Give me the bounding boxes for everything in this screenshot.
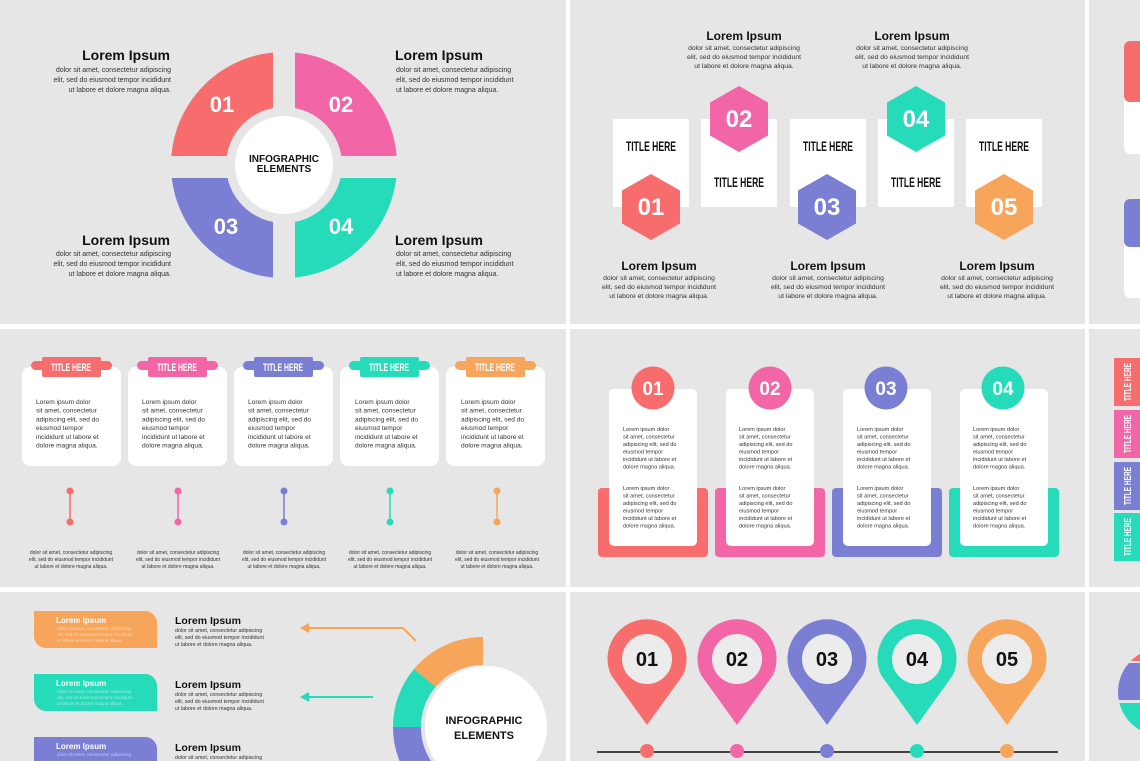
bottom small texts: dolor sit amet, consectetur adipiscing xyxy=(349,550,431,556)
panel: numbered cards with bases: Lorem ipsum dolor xyxy=(973,427,1019,433)
texts: dolor sit amet, consectetur adipiscing xyxy=(941,275,1053,282)
panel: numbered cards with bases: adipiscing elit, sed do xyxy=(973,442,1026,448)
panel: right column top cards xyxy=(1124,41,1140,298)
panel: numbered cards with bases: sit amet, consectetur xyxy=(739,434,791,440)
panel: numbered cards with bases: adipiscing elit, sed do xyxy=(739,501,792,507)
panel: numbered cards with bases: sit amet, consectetur xyxy=(857,434,909,440)
panel: numbered cards with bases: Lorem ipsum dolor xyxy=(739,427,785,433)
card texts: dolore magna aliqua. xyxy=(142,442,204,450)
panel: numbered cards with bases: dolore magna aliqua. xyxy=(623,464,676,470)
panel: numbered cards with bases: adipiscing elit, sed do xyxy=(623,442,676,448)
texts: dolor sit amet, consectetur adipiscing xyxy=(688,45,800,52)
timeline line xyxy=(597,751,1058,753)
texts: ut labore et dolore magna aliqua. xyxy=(862,63,962,70)
tabs: TITLE HERE xyxy=(369,362,409,374)
panel: right column pie xyxy=(1118,654,1140,730)
chart: quadrant circle: ELEMENTS xyxy=(257,164,312,175)
side texts: Lorem Ipsum xyxy=(175,679,241,691)
card texts: sit amet, consectetur xyxy=(355,408,417,415)
card texts: eiusmod tempor xyxy=(355,425,403,432)
side texts: elit, sed do eiusmod tempor incididunt xyxy=(175,635,264,641)
panel: numbered cards with bases: Lorem ipsum dolor xyxy=(623,486,669,492)
card texts: sit amet, consectetur xyxy=(142,408,204,415)
chart: quadrant circle: 02 xyxy=(329,92,353,117)
card texts: sit amet, consectetur xyxy=(248,408,310,415)
card texts: adipiscing elit, sed do xyxy=(36,416,99,423)
panel: numbered cards with bases: sit amet, consectetur xyxy=(857,494,909,500)
panel: numbered cards with bases: sit amet, consectetur xyxy=(973,494,1025,500)
panel: numbered cards with bases: Lorem ipsum dolor xyxy=(973,486,1019,492)
bottom small texts: ut labore et dolore magna aliqua. xyxy=(247,564,321,570)
tabs: TITLE HERE xyxy=(157,362,197,374)
text block: bottom left xyxy=(53,232,171,278)
chart: quadrant circle: 01 xyxy=(210,92,234,117)
panel: numbered cards with bases: 02 xyxy=(759,379,781,400)
chart: quadrant circle: INFOGRAPHIC xyxy=(249,154,319,165)
panel: numbered cards with bases: incididunt ut labore et xyxy=(623,516,677,522)
panel: numbered cards with bases: incididunt ut labore et xyxy=(857,516,911,522)
texts: Lorem Ipsum xyxy=(621,259,697,273)
panel: numbered cards with bases: 04 xyxy=(992,379,1014,400)
side texts: ut labore et dolore magna aliqua. xyxy=(175,706,252,712)
panel: numbered cards with bases: adipiscing elit, sed do xyxy=(623,501,676,507)
bottom small texts: elit, sed do eiusmod tempor incididunt xyxy=(136,557,221,563)
text block: bottom right: elit, sed do eiusmod tempor incididunt xyxy=(396,261,514,268)
bottom small texts: ut labore et dolore magna aliqua. xyxy=(353,564,427,570)
panel: numbered cards with bases: dolore magna aliqua. xyxy=(739,464,792,470)
colored cards: ut labore et dolore magna aliqua. xyxy=(57,701,123,706)
panel: numbered cards with bases: incididunt ut labore et xyxy=(623,457,677,463)
panel: numbered cards with bases: sit amet, consectetur xyxy=(623,434,675,440)
panel: circle quadrants xyxy=(53,45,514,285)
text block: top right xyxy=(395,47,514,94)
card texts: eiusmod tempor xyxy=(248,425,296,432)
bottom small texts: dolor sit amet, consectetur adipiscing xyxy=(456,550,538,556)
panel: numbered cards with bases: sit amet, consectetur xyxy=(623,494,675,500)
text block: top right: elit, sed do eiusmod tempor incididunt xyxy=(396,77,514,84)
panel: numbered cards with bases: incididunt ut labore et xyxy=(857,457,911,463)
texts xyxy=(602,29,1054,300)
card texts: Lorem ipsum dolor xyxy=(248,399,303,406)
hexagons xyxy=(622,86,1033,240)
text block: bottom left: Lorem Ipsum xyxy=(82,232,170,248)
text block: bottom left: ut labore et dolore magna aliqua. xyxy=(69,271,171,278)
card texts: incididunt ut labore et xyxy=(142,434,205,441)
panel: numbered cards with bases: dolore magna aliqua. xyxy=(623,524,676,530)
card texts: sit amet, consectetur xyxy=(461,408,523,415)
panel: numbered cards with bases: dolore magna aliqua. xyxy=(857,524,910,530)
tabs: TITLE HERE xyxy=(51,362,91,374)
card titles xyxy=(626,138,1029,190)
panel: hexagon steps xyxy=(602,29,1054,300)
hexagons: 02 xyxy=(726,106,752,133)
hexagons: 03 xyxy=(814,194,840,221)
bottom small texts: ut labore et dolore magna aliqua. xyxy=(141,564,215,570)
card texts: sit amet, consectetur xyxy=(36,408,98,415)
texts: ut labore et dolore magna aliqua. xyxy=(609,293,709,300)
side texts xyxy=(175,615,264,761)
texts: ut labore et dolore magna aliqua. xyxy=(778,293,878,300)
panel: numbered cards with bases: dolore magna aliqua. xyxy=(973,464,1026,470)
side texts: ut labore et dolore magna aliqua. xyxy=(175,642,252,648)
texts: dolor sit amet, consectetur adipiscing xyxy=(856,45,968,52)
card texts: Lorem ipsum dolor xyxy=(461,399,516,406)
texts: dolor sit amet, consectetur adipiscing xyxy=(603,275,715,282)
panel: map pins timeline: 01 xyxy=(636,649,658,671)
card texts: adipiscing elit, sed do xyxy=(355,416,418,423)
panel: right column vertical tabs: TITLE HERE xyxy=(1123,518,1134,556)
card texts: incididunt ut labore et xyxy=(36,434,99,441)
panel: numbered cards with bases: eiusmod tempor xyxy=(973,508,1013,514)
texts: Lorem Ipsum xyxy=(706,29,782,43)
panel: numbered cards with bases: Lorem ipsum dolor xyxy=(857,486,903,492)
tabs: TITLE HERE xyxy=(263,362,303,374)
ring chart xyxy=(393,637,547,761)
card texts: Lorem ipsum dolor xyxy=(36,399,91,406)
panel: numbered cards with bases: incididunt ut labore et xyxy=(739,457,793,463)
card texts: adipiscing elit, sed do xyxy=(142,416,205,423)
colored cards: Lorem Ipsum xyxy=(56,616,106,625)
tabs: TITLE HERE xyxy=(475,362,515,374)
text block: top left xyxy=(53,47,171,94)
panel: numbered cards with bases: eiusmod tempor xyxy=(623,508,663,514)
card texts xyxy=(36,399,524,450)
bottom small texts xyxy=(29,550,540,570)
colored cards: Lorem Ipsum xyxy=(56,679,106,688)
colored cards: dolor sit amet, consectetur adipiscing xyxy=(57,689,132,694)
side texts: Lorem Ipsum xyxy=(175,615,241,627)
panel: numbered cards with bases: eiusmod tempor xyxy=(857,450,897,456)
panel: numbered cards with bases: eiusmod tempor xyxy=(973,450,1013,456)
hexagons: 04 xyxy=(903,106,930,133)
colored cards: dolor sit amet, consectetur adipiscing xyxy=(57,626,132,631)
text block: bottom left: dolor sit amet, consectetur adipiscing xyxy=(56,251,171,258)
texts: ut labore et dolore magna aliqua. xyxy=(694,63,794,70)
panel: map pins timeline: 04 xyxy=(906,649,929,671)
arrow: orange xyxy=(300,623,416,641)
text block: top right: ut labore et dolore magna aliqua. xyxy=(396,87,498,94)
panel: numbered cards with bases: Lorem ipsum dolor xyxy=(623,427,669,433)
panel: numbered cards with bases: eiusmod tempor xyxy=(739,508,779,514)
panel: map pins timeline xyxy=(597,619,1058,758)
panel: numbered cards with bases: adipiscing elit, sed do xyxy=(857,442,910,448)
card texts: dolore magna aliqua. xyxy=(248,442,310,450)
panel: map pins timeline: 03 xyxy=(816,649,838,671)
panel: numbered cards with bases: adipiscing elit, sed do xyxy=(857,501,910,507)
text block: bottom right: ut labore et dolore magna aliqua. xyxy=(396,271,498,278)
colored cards: ut labore et dolore magna aliqua. xyxy=(57,638,123,643)
card texts: incididunt ut labore et xyxy=(248,434,311,441)
arrow: teal xyxy=(300,692,373,702)
panel: numbered cards with bases xyxy=(598,366,1059,557)
panel: map pins timeline: 02 xyxy=(726,649,748,671)
text block: bottom right: dolor sit amet, consectetur adipiscing xyxy=(396,251,511,258)
panel: numbered cards with bases: dolore magna aliqua. xyxy=(857,464,910,470)
texts: elit, sed do eiusmod tempor incididunt xyxy=(940,284,1054,291)
bottom small texts: ut labore et dolore magna aliqua. xyxy=(34,564,108,570)
text block: top left: ut labore et dolore magna aliqua. xyxy=(69,87,171,94)
bottom small texts: dolor sit amet, consectetur adipiscing xyxy=(30,550,112,556)
card titles: TITLE HERE xyxy=(714,174,764,190)
hexagons: 01 xyxy=(638,194,664,221)
hexagons: 05 xyxy=(991,194,1017,221)
card texts: adipiscing elit, sed do xyxy=(248,416,311,423)
card titles: TITLE HERE xyxy=(803,138,853,154)
chart: quadrant circle: 04 xyxy=(329,214,354,239)
card texts: dolore magna aliqua. xyxy=(355,442,417,450)
side texts: dolor sit amet, consectetur adipiscing xyxy=(175,628,262,634)
bottom small texts: dolor sit amet, consectetur adipiscing xyxy=(137,550,219,556)
text block: bottom left: elit, sed do eiusmod tempor incididunt xyxy=(53,261,171,268)
panel: numbered cards with bases: adipiscing elit, sed do xyxy=(739,442,792,448)
bottom small texts: elit, sed do eiusmod tempor incididunt xyxy=(455,557,540,563)
texts: elit, sed do eiusmod tempor incididunt xyxy=(771,284,885,291)
card texts: incididunt ut labore et xyxy=(461,434,524,441)
bottom small texts: dolor sit amet, consectetur adipiscing xyxy=(243,550,325,556)
panel: numbered cards with bases: 01 xyxy=(642,379,664,400)
colored cards: Lorem Ipsum xyxy=(56,742,106,751)
panel: numbered cards with bases: sit amet, consectetur xyxy=(973,434,1025,440)
colored cards: elit, sed do eiusmod tempor incididunt xyxy=(57,632,133,637)
panel: numbered cards with bases: dolore magna aliqua. xyxy=(973,524,1026,530)
card texts: Lorem ipsum dolor xyxy=(142,399,197,406)
card texts: dolore magna aliqua. xyxy=(36,442,98,450)
side texts: dolor sit amet, consectetur adipiscing xyxy=(175,755,262,761)
bottom small texts: elit, sed do eiusmod tempor incididunt xyxy=(242,557,327,563)
panel: numbered cards with bases: incididunt ut labore et xyxy=(973,516,1027,522)
texts: Lorem Ipsum xyxy=(790,259,866,273)
panel: right column vertical tabs: TITLE HERE xyxy=(1123,363,1134,401)
bottom small texts: ut labore et dolore magna aliqua. xyxy=(460,564,534,570)
card texts: adipiscing elit, sed do xyxy=(461,416,524,423)
texts: elit, sed do eiusmod tempor incididunt xyxy=(855,54,969,61)
text block: top left: Lorem Ipsum xyxy=(82,47,170,63)
panel: numbered cards with bases: adipiscing elit, sed do xyxy=(973,501,1026,507)
card texts: Lorem ipsum dolor xyxy=(355,399,410,406)
text block: top right: Lorem Ipsum xyxy=(395,47,483,63)
texts: ut labore et dolore magna aliqua. xyxy=(947,293,1047,300)
chart: quadrant circle xyxy=(165,45,405,285)
panel: title cards with tabs xyxy=(22,357,545,570)
cards xyxy=(22,367,545,466)
panel: right column vertical tabs: TITLE HERE xyxy=(1123,467,1134,505)
panel: right column vertical tabs xyxy=(1114,358,1140,561)
text block: bottom right: Lorem Ipsum xyxy=(395,232,483,248)
texts: Lorem Ipsum xyxy=(959,259,1035,273)
panel: numbered cards with bases: eiusmod tempor xyxy=(623,450,663,456)
panel: numbered cards with bases: sit amet, consectetur xyxy=(739,494,791,500)
card titles: TITLE HERE xyxy=(626,138,676,154)
panel: numbered cards with bases: Lorem ipsum dolor xyxy=(739,486,785,492)
panel: list with ring xyxy=(34,611,547,761)
text block: top left: elit, sed do eiusmod tempor incididunt xyxy=(53,77,171,84)
panel: numbered cards with bases: dolore magna aliqua. xyxy=(739,524,792,530)
panel: numbered cards with bases: eiusmod tempor xyxy=(739,450,779,456)
ring chart: INFOGRAPHIC xyxy=(446,715,523,727)
connector dots xyxy=(66,488,500,526)
colored cards: elit, sed do eiusmod tempor incididunt xyxy=(57,695,133,700)
card titles: TITLE HERE xyxy=(891,174,941,190)
tabs xyxy=(31,357,536,377)
colored cards: dolor sit amet, consectetur adipiscing xyxy=(57,752,132,757)
card texts: incididunt ut labore et xyxy=(355,434,418,441)
card texts: eiusmod tempor xyxy=(36,425,84,432)
card titles: TITLE HERE xyxy=(979,138,1029,154)
card texts: eiusmod tempor xyxy=(461,425,509,432)
card texts: dolore magna aliqua. xyxy=(461,442,523,450)
panel: map pins timeline: 05 xyxy=(996,649,1018,671)
texts: elit, sed do eiusmod tempor incididunt xyxy=(602,284,716,291)
panel: numbered cards with bases: 03 xyxy=(875,379,897,400)
bottom small texts: elit, sed do eiusmod tempor incididunt xyxy=(29,557,114,563)
texts: Lorem Ipsum xyxy=(874,29,950,43)
text block: top left: dolor sit amet, consectetur adipiscing xyxy=(56,67,171,74)
side texts: dolor sit amet, consectetur adipiscing xyxy=(175,692,262,698)
side texts: Lorem Ipsum xyxy=(175,742,241,754)
texts: dolor sit amet, consectetur adipiscing xyxy=(772,275,884,282)
chart: quadrant circle: 03 xyxy=(214,214,238,239)
bottom small texts: elit, sed do eiusmod tempor incididunt xyxy=(348,557,433,563)
cards xyxy=(613,119,1042,207)
ring chart: ELEMENTS xyxy=(454,730,514,742)
panel: right column vertical tabs: TITLE HERE xyxy=(1123,415,1134,453)
panel: numbered cards with bases: Lorem ipsum dolor xyxy=(857,427,903,433)
panel: numbered cards with bases: incididunt ut labore et xyxy=(739,516,793,522)
text block: bottom right xyxy=(395,232,514,278)
colored cards xyxy=(34,611,157,761)
side texts: elit, sed do eiusmod tempor incididunt xyxy=(175,699,264,705)
panel: numbered cards with bases: eiusmod tempor xyxy=(857,508,897,514)
texts: elit, sed do eiusmod tempor incididunt xyxy=(687,54,801,61)
panel: numbered cards with bases: incididunt ut labore et xyxy=(973,457,1027,463)
text block: top right: dolor sit amet, consectetur adipiscing xyxy=(396,67,511,74)
card texts: eiusmod tempor xyxy=(142,425,190,432)
